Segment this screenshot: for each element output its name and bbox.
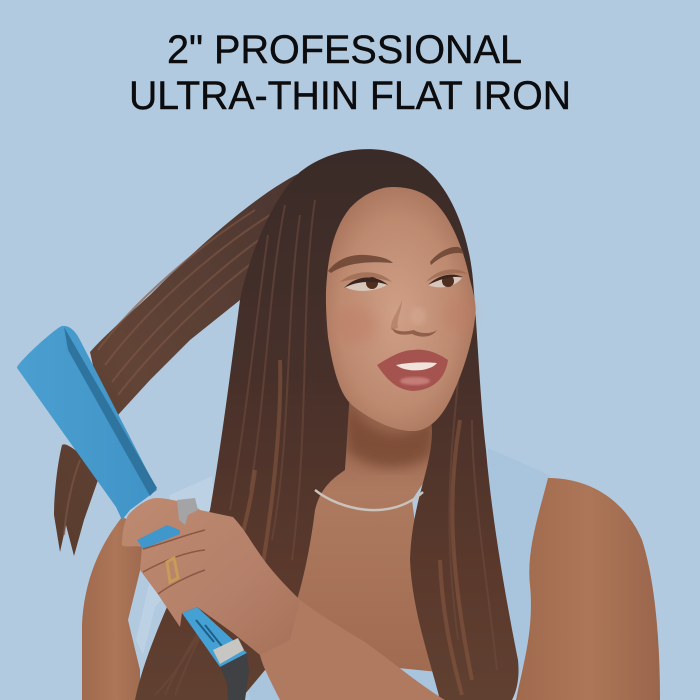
hand [122, 498, 300, 655]
iron handle [182, 607, 247, 667]
finger shadows [143, 530, 205, 594]
lips [377, 350, 448, 391]
neck shadow [345, 400, 436, 468]
necklace [315, 490, 423, 510]
right shoulder and arm [516, 478, 660, 700]
title [129, 28, 571, 118]
main hair [135, 149, 519, 700]
forearm [260, 600, 445, 700]
iron grip between fingers [137, 525, 180, 549]
iron control marks [196, 620, 225, 650]
model photo illustration [17, 149, 660, 700]
face [326, 187, 476, 431]
iron band [213, 638, 244, 664]
title: 2" PROFESSIONAL [167, 28, 522, 72]
title: ULTRA-THIN FLAT IRON [129, 74, 571, 118]
eyebrows [328, 255, 393, 273]
neck and chest [285, 390, 438, 680]
lifted hair strand [54, 168, 310, 556]
tank top [136, 448, 551, 700]
hair sheen [155, 200, 497, 695]
eyelid shadow [340, 272, 392, 282]
strand highlights [64, 210, 285, 535]
iron [17, 326, 249, 700]
rings [167, 498, 198, 582]
eyes [345, 279, 387, 291]
nose [391, 300, 437, 337]
iron tip and cord [220, 653, 249, 700]
cheek blush [333, 297, 472, 345]
iron plate [17, 326, 157, 520]
left arm [82, 517, 150, 700]
